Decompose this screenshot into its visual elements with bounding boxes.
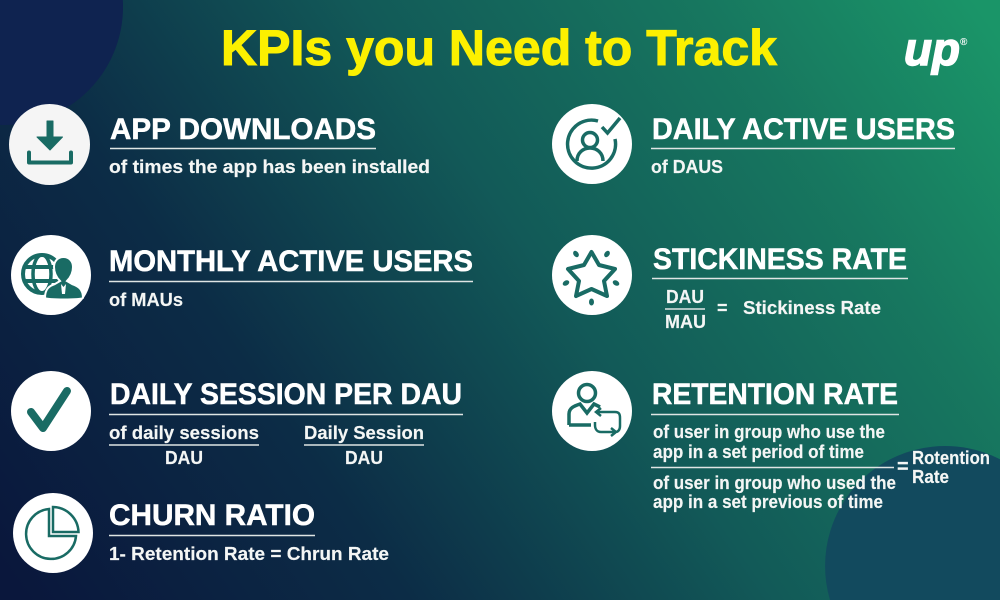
icon: check mark — [11, 371, 91, 451]
formula — [665, 287, 881, 332]
logo: up — [904, 23, 960, 75]
icon: download — [9, 104, 90, 185]
heading: CHURN RATIO — [109, 499, 315, 532]
panel: churn ratio — [13, 493, 389, 573]
formula numerator — [653, 422, 885, 462]
icon: user with check — [552, 104, 632, 184]
description: of MAUs — [109, 290, 183, 310]
title: KPIs you Need to Track — [221, 20, 777, 76]
formula: 1- Retention Rate = Chrun Rate — [109, 544, 389, 564]
heading: STICKINESS RATE — [653, 243, 907, 276]
description: of times the app has been installed — [109, 157, 430, 177]
formula denominator: app in a set previous of time — [653, 492, 883, 512]
heading: DAILY ACTIVE USERS — [652, 113, 955, 146]
formula: Stickiness Rate — [743, 298, 881, 318]
formula denominator — [653, 473, 896, 512]
formula: DAU — [666, 287, 704, 307]
formula denominator: of user in group who used the — [653, 473, 896, 493]
formula numerator: of user in group who use the — [653, 422, 885, 442]
formula numerator: app in a set period of time — [653, 442, 864, 462]
description: of DAUS — [651, 157, 723, 177]
heading: RETENTION RATE — [652, 378, 898, 411]
formula right: DAU — [345, 448, 383, 468]
panel: daily active users — [552, 104, 955, 184]
formula result: Rotention — [912, 448, 990, 468]
icon: user with cycle arrows — [552, 371, 632, 451]
formula result: = — [897, 456, 909, 478]
formula: MAU — [665, 312, 706, 332]
panel: app downloads — [9, 104, 430, 185]
formula: = — [717, 298, 728, 318]
formula left: DAU — [165, 448, 203, 468]
formula result: Rate — [912, 467, 949, 487]
heading: MONTHLY ACTIVE USERS — [109, 245, 473, 278]
heading: APP DOWNLOADS — [110, 113, 376, 146]
formula result — [897, 448, 990, 487]
formula right: Daily Session — [304, 423, 424, 443]
panel: monthly active users — [11, 235, 473, 315]
icon: star — [552, 235, 632, 315]
panel: daily session per DAU — [11, 371, 463, 468]
panel: retention rate — [552, 371, 990, 512]
heading: DAILY SESSION PER DAU — [110, 378, 462, 411]
formula right — [304, 423, 424, 468]
icon: pie chart — [13, 493, 93, 573]
formula left — [109, 423, 259, 468]
panel: stickiness rate — [552, 235, 908, 332]
logo: ® — [960, 37, 968, 48]
formula left: of daily sessions — [109, 423, 259, 443]
icon: globe and businessman — [11, 235, 91, 315]
